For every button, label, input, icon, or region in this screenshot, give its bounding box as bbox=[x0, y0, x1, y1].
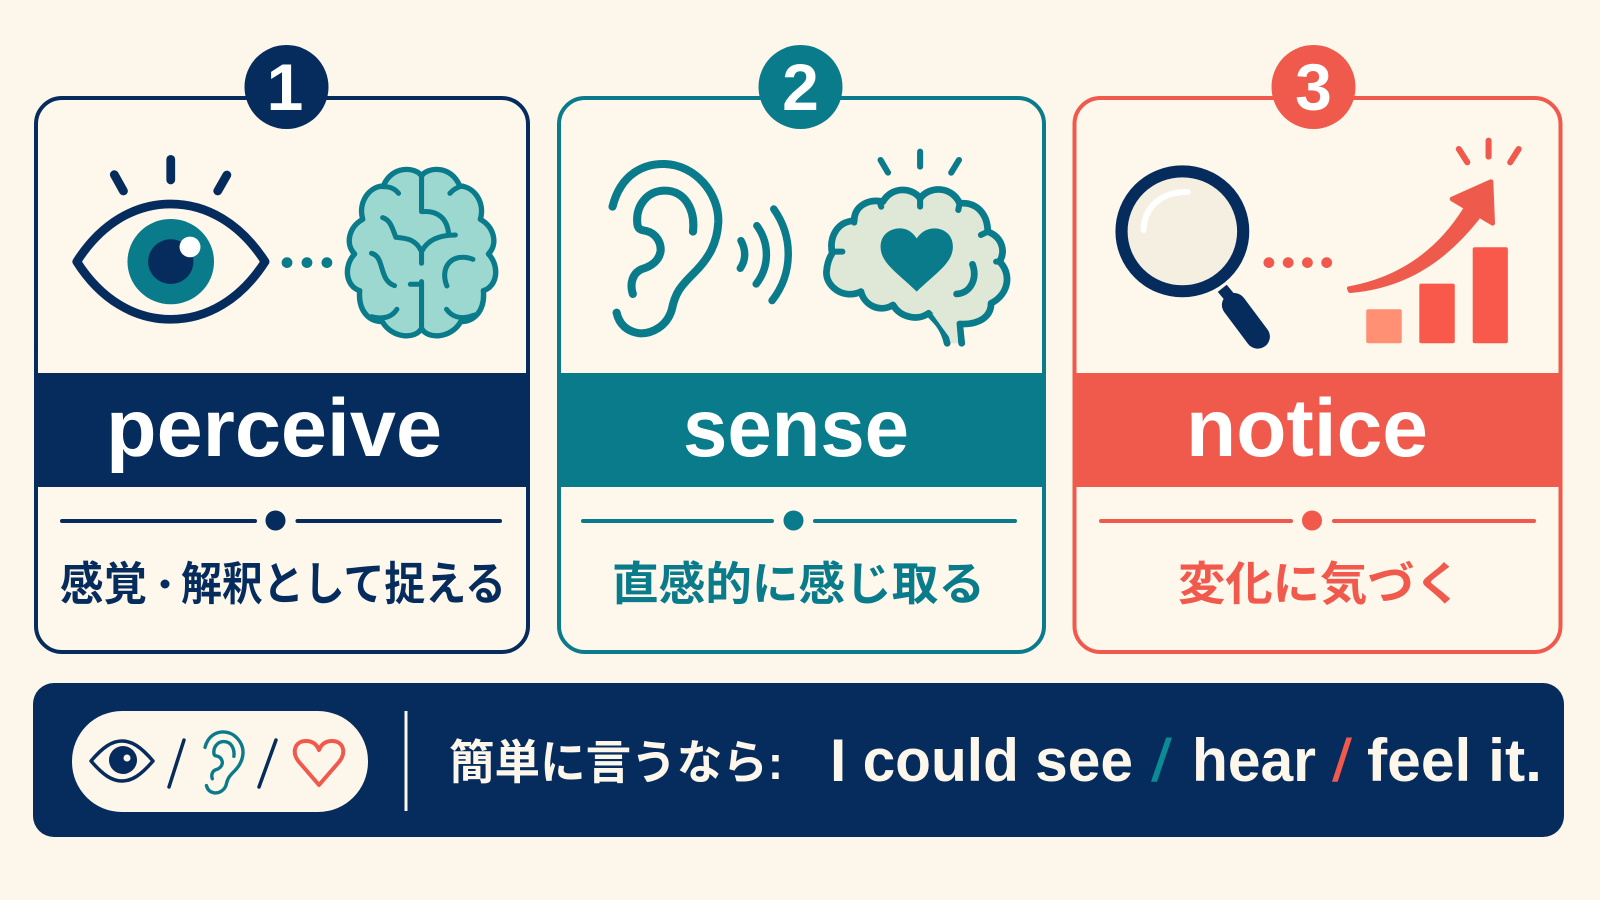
summary sentence: I could see bbox=[830, 727, 1133, 794]
summary sentence: hear bbox=[1192, 727, 1316, 794]
icon: eye connected to brain bbox=[77, 159, 496, 336]
vertical divider bbox=[404, 711, 408, 811]
summary sentence: / bbox=[1332, 727, 1352, 794]
description: sense: 直感的に感じ取る bbox=[612, 558, 985, 610]
number badge 2 bbox=[758, 45, 842, 129]
lead-in text: 簡単に言うなら: bbox=[449, 736, 783, 789]
divider with dot bbox=[581, 510, 1017, 530]
icon: ear bbox=[205, 732, 243, 793]
panel: notice bbox=[1074, 45, 1560, 652]
summary sentence: / bbox=[1151, 727, 1172, 794]
band: notice bbox=[1074, 373, 1560, 487]
panel: perceive bbox=[36, 45, 528, 652]
number badge 2: 2 bbox=[782, 50, 819, 124]
band: sense bbox=[559, 373, 1044, 487]
slash bbox=[259, 740, 276, 787]
summary bar bbox=[33, 683, 1564, 837]
band: notice: notice bbox=[1186, 383, 1428, 474]
description: perceive: 感覚 bbox=[60, 558, 147, 610]
icon: ear with sound waves and heart brain bbox=[613, 152, 1007, 343]
summary sentence: feel it. bbox=[1367, 727, 1542, 794]
description: notice: 変化に気づく bbox=[1178, 558, 1462, 610]
number badge 1 bbox=[244, 45, 328, 129]
icon pill: eye, ear, heart bbox=[72, 711, 368, 812]
summary sentence bbox=[830, 727, 1542, 794]
number badge 3 bbox=[1272, 45, 1356, 129]
card frame bbox=[1074, 98, 1560, 652]
icon: eye bbox=[91, 741, 153, 781]
band: perceive: perceive bbox=[106, 383, 442, 474]
card frame bbox=[559, 98, 1044, 652]
number badge 3: 3 bbox=[1295, 50, 1332, 124]
slash bbox=[169, 740, 184, 787]
divider with dot bbox=[1099, 510, 1536, 530]
description: perceive bbox=[60, 558, 506, 610]
band: perceive bbox=[36, 373, 528, 487]
panel: sense bbox=[559, 45, 1044, 652]
card frame bbox=[36, 98, 528, 652]
band: sense: sense bbox=[683, 383, 909, 474]
description: perceive: 解釈として捉える bbox=[181, 558, 506, 610]
divider with dot bbox=[60, 510, 502, 530]
number badge 1: 1 bbox=[267, 50, 303, 124]
icon: magnifier and rising chart bbox=[1122, 141, 1519, 343]
icon: heart bbox=[295, 741, 343, 785]
